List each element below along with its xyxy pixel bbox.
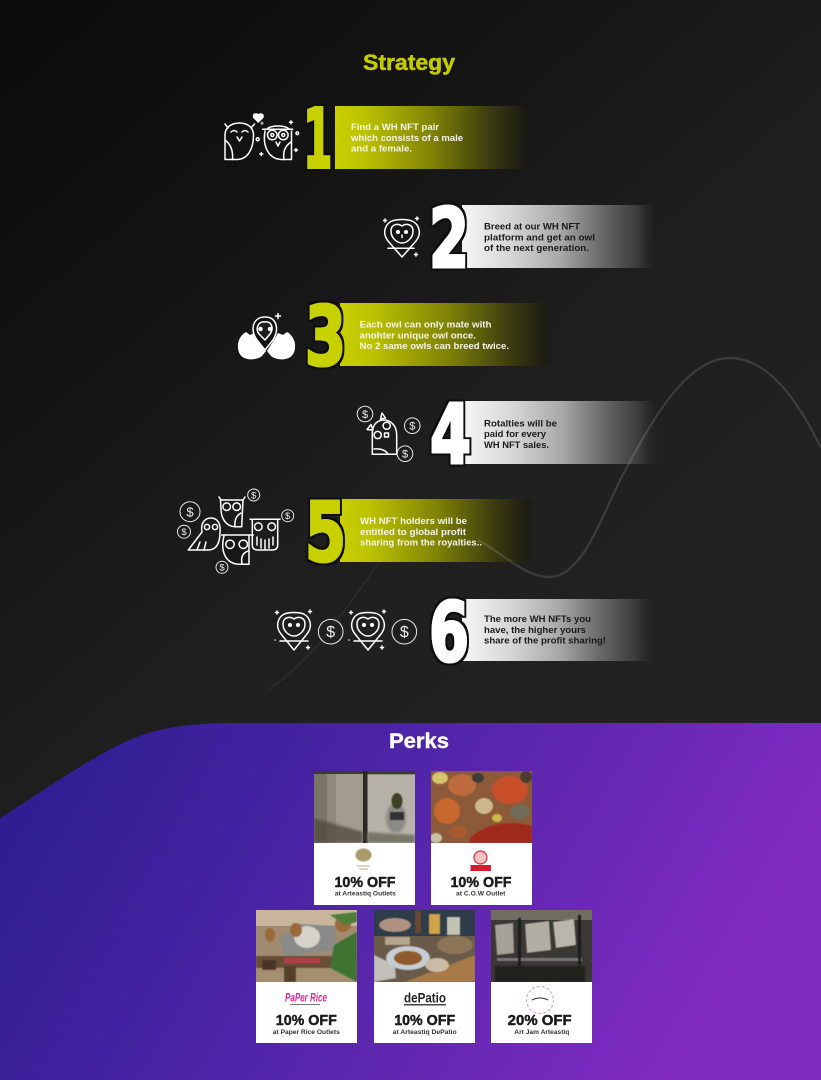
step 5 text: entitled to global profit: [360, 526, 466, 537]
icon: group of owls with coins: $: [186, 504, 194, 519]
icon: owl with coins: [357, 406, 420, 462]
icon: heart-shaped owls and coins: [275, 610, 417, 650]
step 4: [357, 388, 660, 483]
card: Arteastiq DePatio: [374, 910, 475, 1043]
step 1: [225, 92, 530, 188]
step 6 text: [484, 613, 606, 646]
step 4 text: Rotalties will be: [484, 418, 557, 428]
gradient bar 4: [464, 401, 660, 464]
photo: outlet door: [314, 771, 415, 843]
gradient bar 6: [462, 599, 656, 661]
step 1 text: and a female.: [351, 142, 412, 154]
icon: heart-shaped owls and coins: $: [326, 624, 335, 641]
step 5 text: sharing from the royalties..: [360, 536, 482, 548]
gradient bar 5: [340, 499, 535, 562]
icon: group of owls with coins: $: [219, 563, 225, 574]
step 2 text: of the next generation.: [484, 242, 589, 253]
step 3 text: anohter unique owl once.: [360, 330, 476, 340]
title: Strategy: Strategy: [363, 50, 456, 75]
card: Arteastiq DePatio: 10% OFF: [394, 1013, 455, 1029]
step 6 text: share of the profit sharing!: [484, 634, 606, 646]
icon: group of owls with coins: $: [285, 511, 291, 522]
step 3 text: No 2 same owls can breed twice.: [360, 340, 509, 351]
icon: two owls with heart: [225, 114, 299, 160]
number 6: 6: [429, 586, 469, 681]
card: Art Jam Arteastiq: [491, 910, 592, 1043]
icon: group of owls with coins: [178, 489, 294, 574]
icon: heart-shaped owl: [384, 217, 419, 257]
gradient bar 3: [340, 303, 555, 366]
step 4 text: paid for every: [484, 428, 547, 439]
card: C.O.W Outlet: at C.O.W Outlet: [456, 890, 506, 897]
icon: group of owls with coins: $: [181, 527, 187, 538]
step 6 text: The more WH NFTs you: [484, 613, 591, 624]
card: Paper Rice Outlets: at Paper Rice Outlets: [273, 1029, 340, 1036]
card: Arteastiq Outlets: 10% OFF: [334, 875, 396, 891]
step 5 text: [360, 515, 482, 548]
number 1: 1: [303, 92, 332, 188]
number 5: 5: [305, 486, 346, 581]
logo: Art Jam: [526, 986, 554, 1014]
icon: heart-shaped owls and coins: $: [400, 624, 409, 641]
logo: DePatio: dePatio: [404, 990, 446, 1006]
step 1 text: [350, 121, 463, 154]
step 2 text: [484, 220, 595, 253]
step 5: [178, 486, 535, 581]
step 4 text: WH NFT sales.: [484, 439, 549, 450]
icon: owl with coins: $: [362, 409, 368, 421]
step 2 text: Breed at our WH NFT: [484, 220, 580, 232]
background curve line: [268, 358, 821, 690]
photo: table of food: [374, 910, 475, 982]
card: Arteastiq Outlets: at Arteastiq Outlets: [335, 890, 396, 897]
number 3: 3: [305, 290, 346, 385]
logo: Arteastiq: [356, 848, 372, 869]
step 3 text: [360, 318, 509, 351]
icon: owl with coins: $: [402, 449, 408, 461]
card: Art Jam Arteastiq: Art Jam Arteastiq: [514, 1029, 569, 1036]
card: Arteastiq DePatio: at Arteastiq DePatio: [393, 1029, 457, 1036]
step 2 text: platform and get an owl: [484, 232, 595, 242]
icon: owl with coins: $: [409, 421, 415, 433]
gradient bar 2: [462, 205, 658, 268]
step 4 text: [484, 418, 557, 450]
step 1 text: Find a WH NFT pair: [351, 121, 439, 132]
number 4: 4: [430, 388, 471, 483]
purple wave section: [0, 723, 821, 1080]
step 3: [238, 290, 555, 385]
step 1 text: which consists of a male: [350, 132, 463, 143]
photo: art jam studio: [491, 910, 592, 982]
step 6: [275, 586, 656, 681]
icon: group of owls with coins: $: [251, 490, 257, 502]
title: Perks: Perks: [389, 729, 449, 753]
gradient bar 1: [335, 106, 530, 169]
step 3 text: Each owl can only mate with: [360, 318, 492, 330]
logo: C.O.W: [470, 851, 491, 871]
card: Paper Rice Outlets: [256, 910, 357, 1043]
step 5 text: WH NFT holders will be: [360, 515, 467, 526]
card: Paper Rice Outlets: 10% OFF: [276, 1013, 337, 1029]
step 6 text: have, the higher yours: [484, 624, 586, 635]
card: C.O.W Outlet: [430, 771, 532, 905]
step 2: [384, 192, 658, 287]
logo: Paper Rice: PaPer Rice: [285, 992, 327, 1004]
card: C.O.W Outlet: 10% OFF: [450, 875, 512, 891]
icon: owl hatching from egg: [238, 314, 295, 359]
photo: restaurant: [256, 910, 357, 982]
card: Arteastiq Outlets: [314, 771, 415, 905]
photo: seafood: [430, 771, 532, 843]
card: Art Jam Arteastiq: 20% OFF: [508, 1013, 572, 1029]
number 2: 2: [429, 192, 469, 287]
